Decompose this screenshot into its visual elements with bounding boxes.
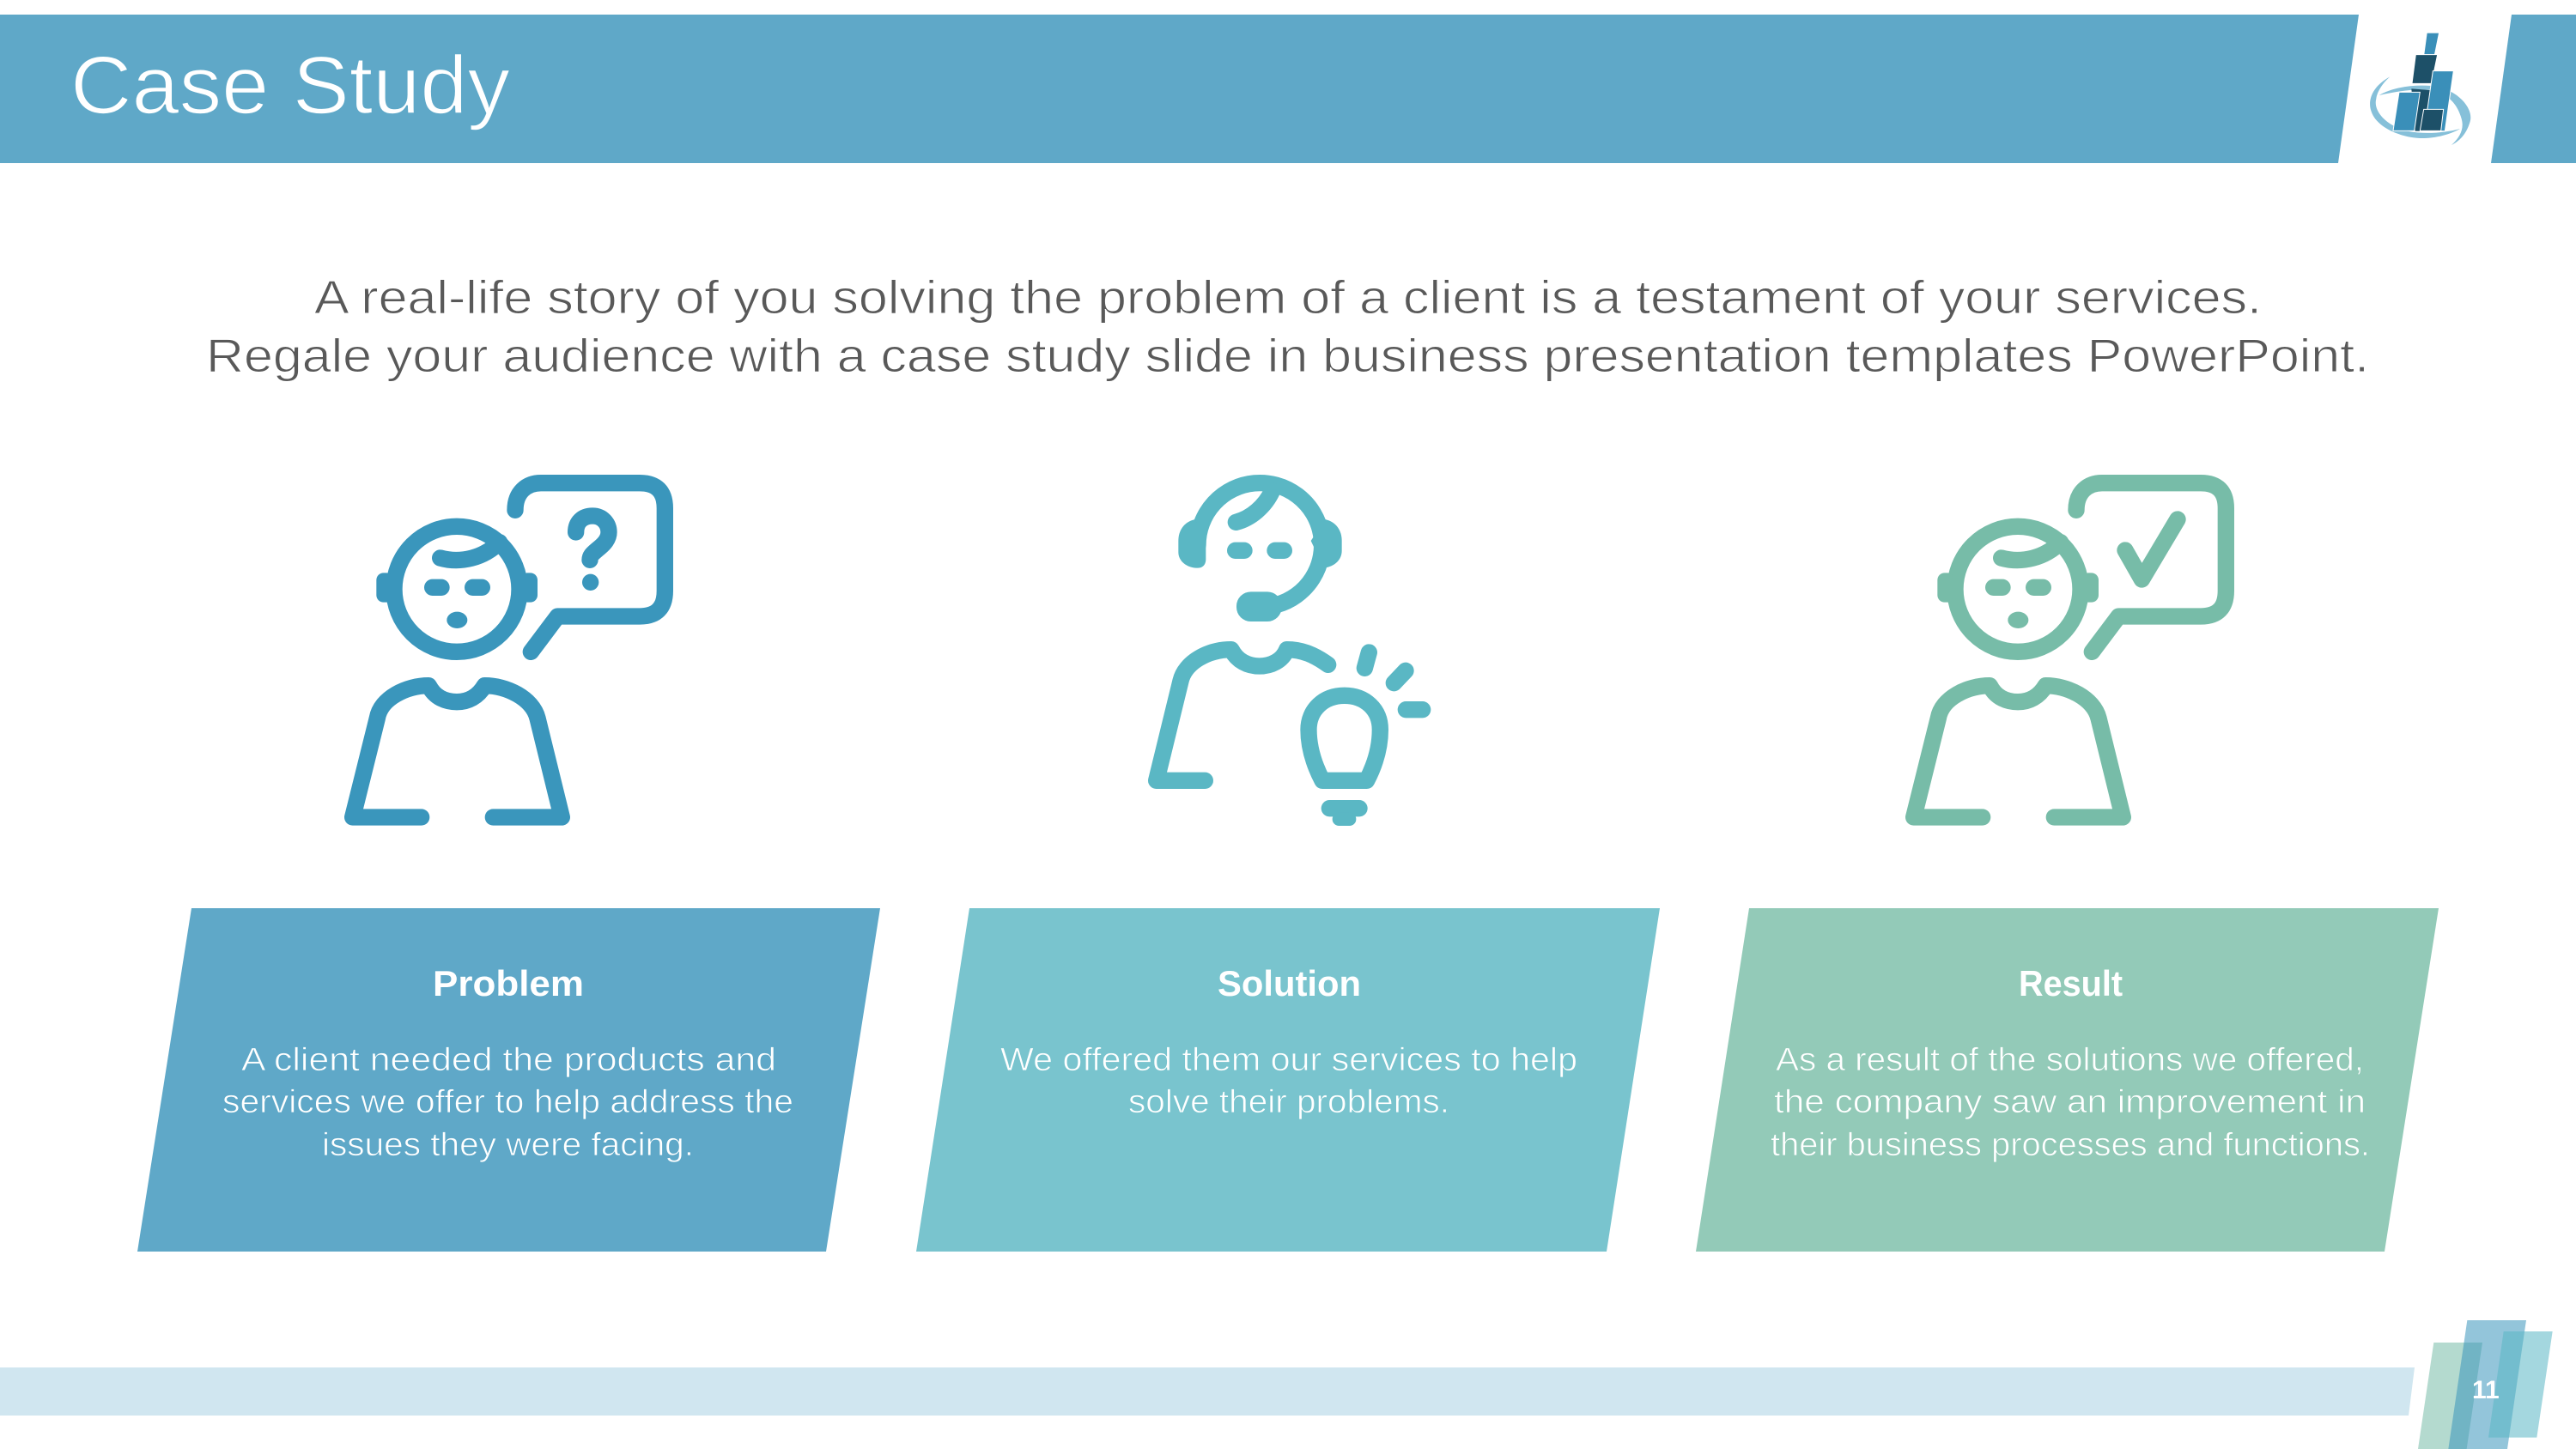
text: problem description: issues they were facing. xyxy=(322,1127,694,1163)
footer bar xyxy=(0,1367,2415,1416)
heading: solution: Solution xyxy=(1218,963,1361,1003)
text: solution description xyxy=(1000,1042,1577,1120)
intro text: A real-life story of you solving the problem of a client is a testament of your services. xyxy=(314,270,2262,324)
panel: result xyxy=(1696,908,2439,1252)
icon: person with check mark bubble xyxy=(1914,483,2226,817)
heading: problem: Problem xyxy=(433,963,584,1003)
panel: problem xyxy=(137,908,880,1252)
intro text: Regale your audience with a case study slide in business presentation templates PowerPoint. xyxy=(206,329,2369,382)
intro text xyxy=(206,270,2369,382)
text: result description: the company saw an improvement in xyxy=(1774,1084,2366,1120)
text: problem description: services we offer to help address the xyxy=(222,1084,793,1120)
text: result description: their business processes and functions. xyxy=(1771,1127,2370,1163)
panel: solution xyxy=(916,908,1660,1252)
text: result description: As a result of the solutions we offered, xyxy=(1776,1042,2364,1078)
heading: result: Result xyxy=(2019,963,2123,1003)
text: problem description xyxy=(222,1042,793,1163)
footer accent shapes xyxy=(2418,1320,2553,1449)
icon: company logo xyxy=(2370,33,2470,145)
text: problem description: A client needed the products and xyxy=(241,1042,776,1078)
text: solution description: We offered them our services to help xyxy=(1000,1042,1577,1078)
text: result description xyxy=(1771,1042,2370,1163)
header band xyxy=(0,15,2576,163)
icon: support agent with light bulb xyxy=(1157,483,1423,826)
page number: 11 xyxy=(2472,1376,2500,1404)
title: Case Study xyxy=(70,39,510,131)
text: solution description: solve their problems. xyxy=(1128,1084,1449,1120)
icon: person with question bubble xyxy=(353,483,665,817)
